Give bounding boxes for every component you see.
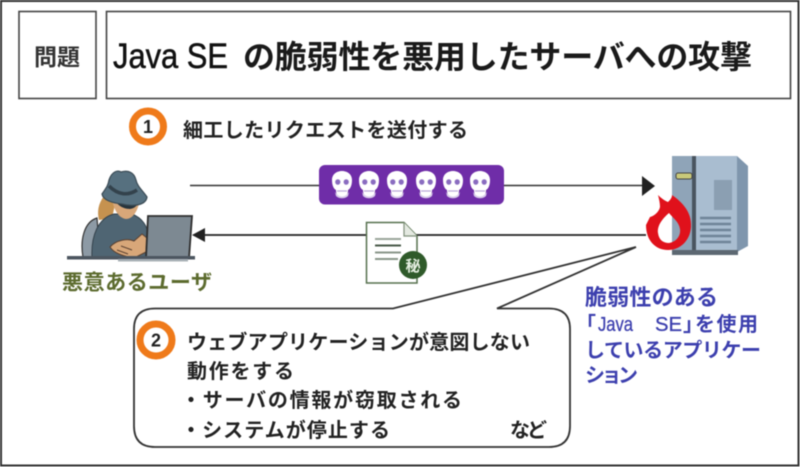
caption: vulnerable application [576, 285, 761, 387]
bubble text: ・システムが停止する [181, 418, 390, 442]
label: 問題 [19, 12, 96, 98]
icon: secret document: 秘 [405, 258, 421, 275]
title [106, 12, 790, 98]
caption: vulnerable application: しているアプリケー [585, 339, 761, 362]
server side [737, 156, 748, 252]
speech bubble [134, 247, 636, 447]
step 2 badge [140, 324, 172, 356]
hat [102, 171, 147, 205]
caption: vulnerable application: を使用 [695, 313, 758, 336]
icon: server on fire [646, 156, 748, 255]
caption: vulnerable application: 」 [683, 314, 703, 336]
label: malicious user: 悪意あるユーザ [62, 272, 212, 294]
step 1 label [132, 111, 468, 142]
desk [67, 256, 195, 260]
arrow: request to server [190, 176, 655, 196]
step 1 badge: 1 [143, 117, 153, 137]
hair [98, 196, 116, 220]
caption: vulnerable application: 脆弱性のある [585, 285, 718, 310]
title: Java SE [113, 37, 228, 76]
hands [110, 234, 147, 258]
face [112, 198, 140, 219]
bubble text: ウェブアプリケーションが意図しない [187, 330, 530, 354]
icon: hacker at laptop [67, 171, 195, 262]
caption: vulnerable application: 「 [576, 313, 596, 336]
bubble text [181, 330, 547, 442]
server front [672, 156, 737, 252]
body [92, 214, 148, 257]
step 2 badge: 2 [151, 330, 161, 350]
bubble text: 動作をする [187, 360, 294, 383]
label: 問題: 問題 [34, 44, 80, 70]
flame [646, 195, 691, 250]
status panel [676, 173, 692, 179]
laptop [146, 216, 192, 258]
title: の脆弱性を悪用したサーバへの攻撃 [243, 39, 752, 75]
malicious payload band with skulls [319, 165, 504, 204]
bubble text: など [510, 419, 547, 442]
caption: vulnerable application: ション [585, 365, 638, 387]
step 1 badge [132, 111, 164, 142]
caption: vulnerable application: SE [655, 314, 682, 336]
step 1 text: 細工したリクエストを送付する [183, 119, 468, 142]
arrow: response to attacker [192, 228, 646, 242]
chair [82, 218, 100, 257]
caption: vulnerable application: Java [598, 314, 634, 336]
server vents [700, 218, 731, 242]
bubble text: ・サーバの情報が窃取される [181, 388, 462, 412]
icon: secret document [366, 222, 427, 283]
